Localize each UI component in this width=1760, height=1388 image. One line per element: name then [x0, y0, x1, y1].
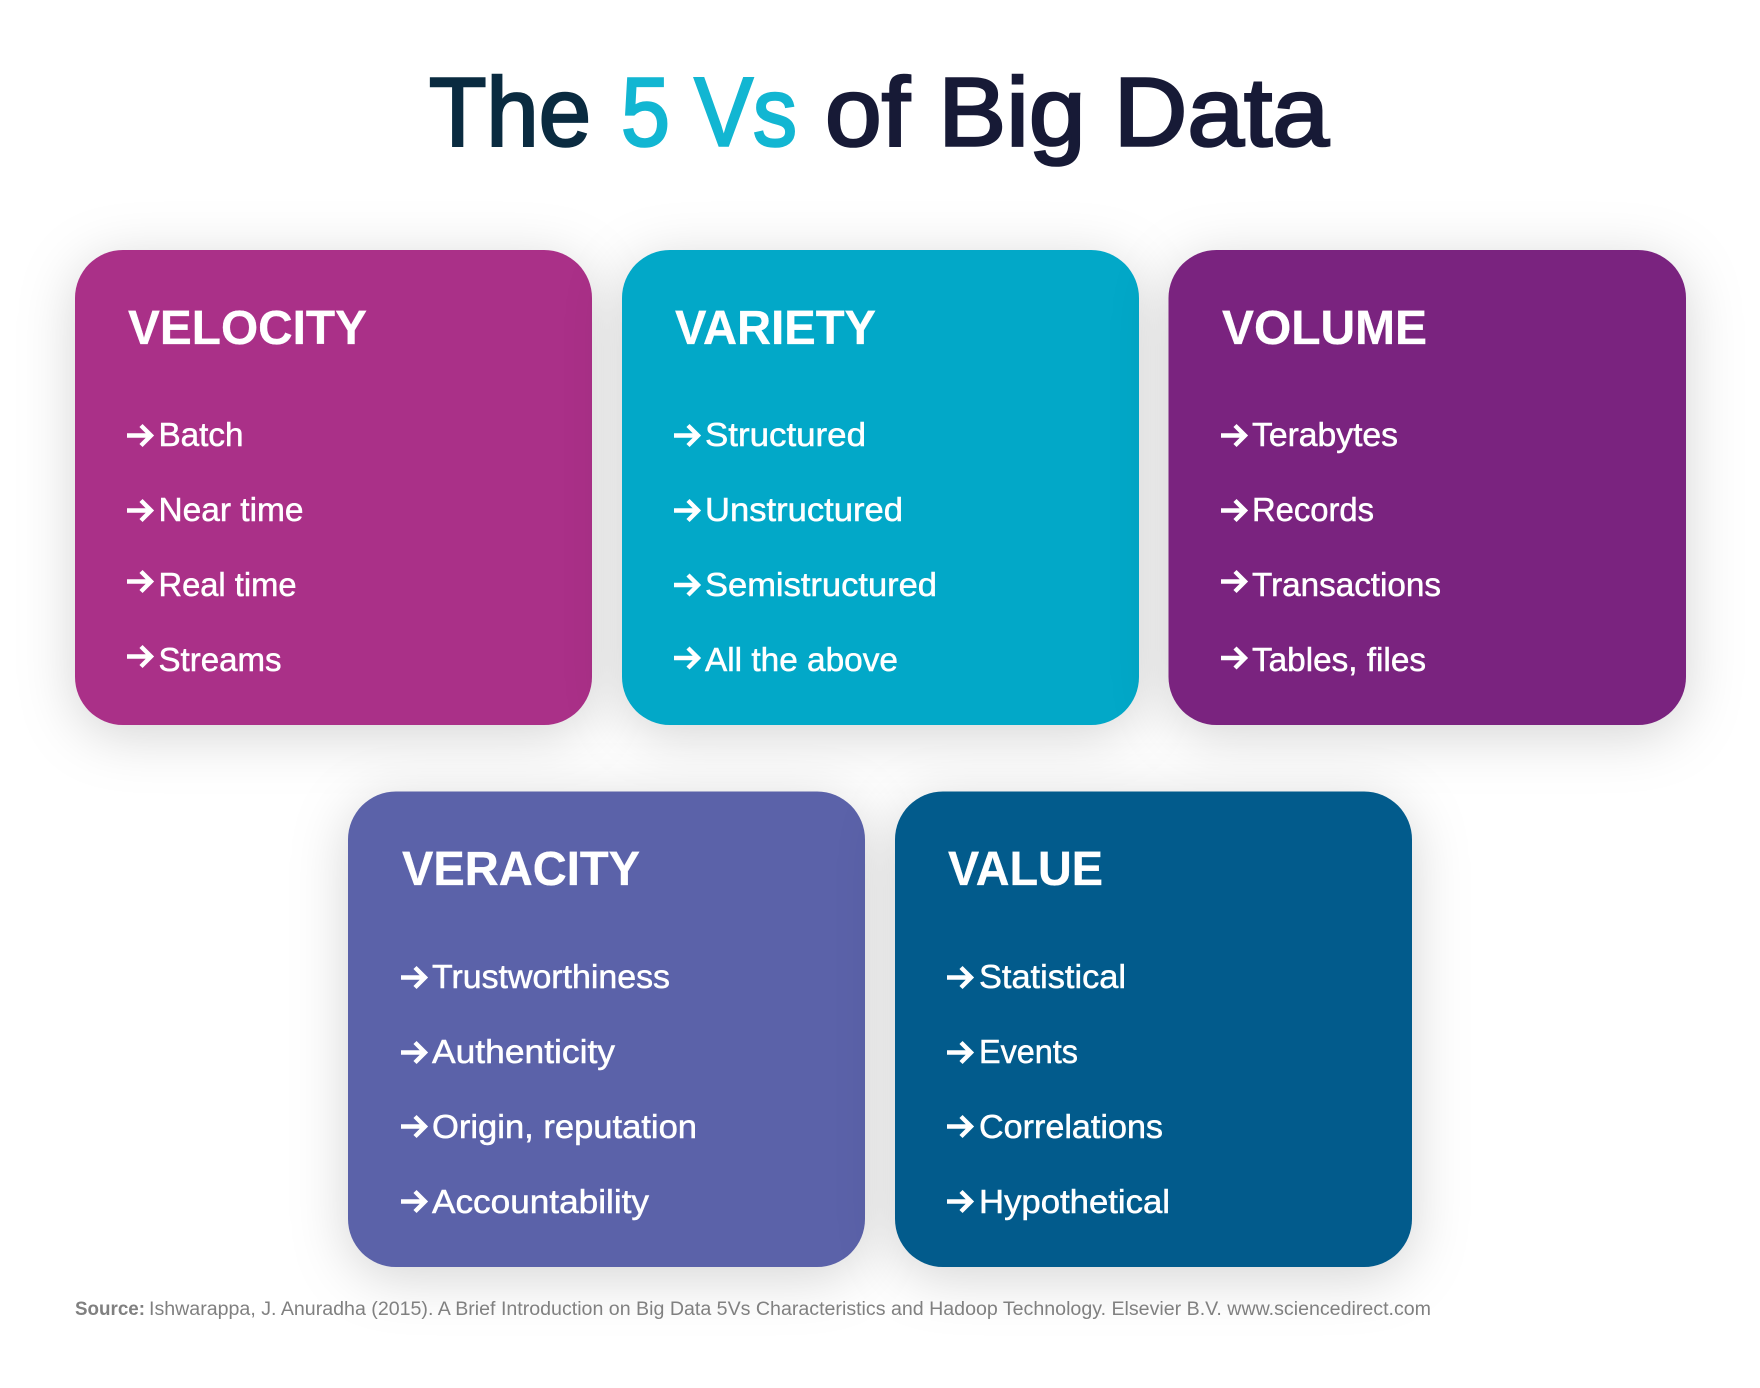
- item: real time: Real time: [158, 566, 296, 603]
- item: statistical: Statistical: [979, 958, 1126, 995]
- title: [429, 58, 1329, 166]
- panel: volume: [1168, 250, 1686, 725]
- source note: Source:: [75, 1299, 145, 1320]
- panel: value: [895, 792, 1412, 1267]
- item: terabytes: Terabytes: [1252, 416, 1398, 453]
- item: records: Records: [1252, 491, 1374, 528]
- item: hypothetical: Hypothetical: [979, 1183, 1170, 1220]
- item: accountability: Accountability: [432, 1183, 650, 1220]
- title: of Big Data: [825, 58, 1329, 166]
- source note: Ishwarappa, J. Anuradha (2015). A Brief Introduction on Big Data 5Vs Characteristics and Hadoop Technology. Elsevier B.V. www.sciencedirect.com: [149, 1299, 1431, 1320]
- item: batch: Batch: [158, 416, 244, 453]
- panel: velocity: [75, 250, 592, 725]
- heading: value: VALUE: [948, 843, 1103, 896]
- item: all the above: All the above: [705, 641, 898, 678]
- heading: volume: VOLUME: [1222, 302, 1427, 355]
- heading: veracity: VERACITY: [402, 843, 640, 896]
- item: events: Events: [979, 1033, 1078, 1070]
- item: structured: Structured: [705, 416, 866, 453]
- panel: variety: [622, 250, 1139, 725]
- panel: veracity: [348, 792, 865, 1267]
- item: streams: Streams: [158, 641, 282, 678]
- item: near time: Near time: [158, 491, 304, 528]
- item: unstructured: Unstructured: [705, 491, 903, 528]
- title: The: [429, 58, 591, 166]
- item: correlations: Correlations: [979, 1108, 1163, 1145]
- item: authenticity: Authenticity: [432, 1033, 616, 1070]
- heading: velocity: VELOCITY: [128, 302, 367, 355]
- heading: variety: VARIETY: [675, 302, 876, 355]
- item: transactions: Transactions: [1252, 566, 1441, 603]
- item: semistructured: Semistructured: [705, 566, 937, 603]
- title: 5 Vs: [621, 58, 797, 166]
- item: tables, files: Tables, files: [1252, 641, 1426, 678]
- item: trustworthiness: Trustworthiness: [432, 958, 670, 995]
- item: origin, reputation: Origin, reputation: [432, 1108, 697, 1145]
